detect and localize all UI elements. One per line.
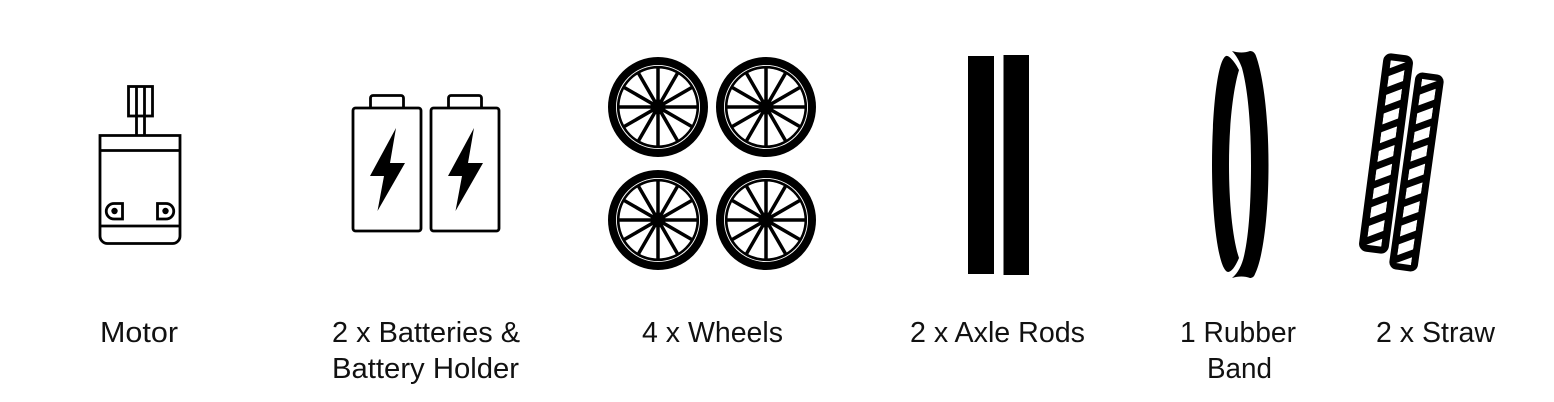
icon: batteries xyxy=(353,96,499,231)
icon: straw one xyxy=(1358,48,1414,259)
icon: axle rods xyxy=(968,55,1029,275)
icon: battery two xyxy=(431,96,499,231)
icon: straws xyxy=(1358,48,1446,277)
label: motor: Motor xyxy=(100,317,178,349)
icon: wheels xyxy=(612,61,812,266)
icon: rubber band xyxy=(1212,51,1268,278)
icon: battery one xyxy=(353,96,421,231)
icon: wheel bottom right xyxy=(720,174,812,266)
icon: motor xyxy=(100,86,180,244)
label: rubber band: 1 Rubber xyxy=(1180,317,1296,349)
icon: wheel top right xyxy=(720,61,812,153)
label: batteries and holder: 2 x Batteries & xyxy=(332,317,520,349)
icon: wheel top left xyxy=(612,61,704,153)
icon: straw two xyxy=(1389,72,1444,272)
label: batteries and holder xyxy=(332,317,520,385)
label: batteries and holder: Battery Holder xyxy=(332,353,519,385)
label: rubber band: Band xyxy=(1207,353,1272,385)
label: wheels: 4 x Wheels xyxy=(642,317,783,349)
label: axle rods: 2 x Axle Rods xyxy=(910,317,1085,349)
label: rubber band xyxy=(1180,317,1296,385)
icon: wheel bottom left xyxy=(612,174,704,266)
label: straw: 2 x Straw xyxy=(1376,317,1496,349)
